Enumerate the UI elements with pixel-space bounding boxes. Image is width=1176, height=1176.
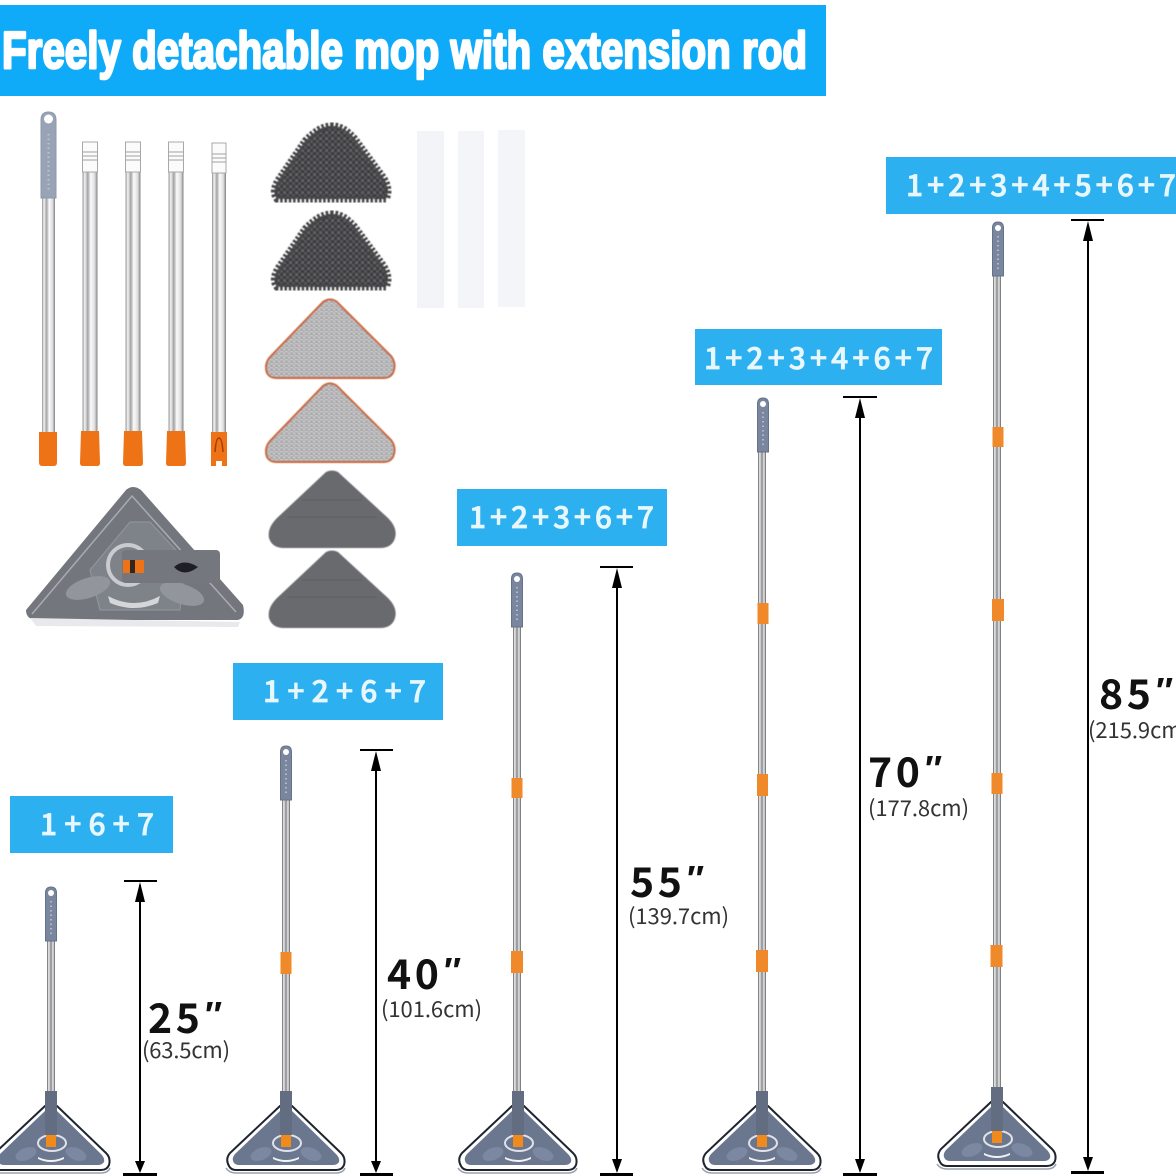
measurement: 85 inch: 85 (1099, 661, 1151, 721)
assembled mop: 40 inch (226, 746, 345, 1173)
measurement: 70 inch: ″ (923, 748, 942, 789)
tag: 1+2+6+7 (233, 663, 443, 720)
parts: extension rod 2 (80, 142, 100, 466)
parts: white strip 1 (417, 131, 444, 308)
parts: triangular mop base (26, 487, 244, 627)
tag: 1+2+3+4+6+7: 1+2+3+4+6+7 (704, 334, 933, 378)
arrow: 25 inch (123, 880, 157, 1176)
tag: 1+6+7: 1+6+7 (40, 800, 154, 844)
parts: white strip 3 (498, 130, 525, 307)
arrow: 85 inch (1071, 219, 1104, 1174)
measurement: 25 inch: ″ (203, 994, 222, 1035)
parts: orange-edged pad 2 (266, 384, 395, 462)
tag: 1+6+7 (10, 796, 173, 853)
tag: 1+2+6+7: 1+2+6+7 (263, 667, 426, 711)
parts: chenille pad 2 (274, 214, 388, 287)
tag: 1+2+3+6+7 (457, 489, 667, 546)
assembled mop: 70 inch (702, 398, 821, 1173)
measurement: 70 inch (868, 739, 969, 823)
assembled mop: 55 inch (458, 573, 577, 1173)
parts: extension rod 4 (166, 142, 186, 466)
arrow: 55 inch (600, 566, 633, 1176)
parts: grey microfiber pad 1 (269, 470, 396, 548)
parts: extension rod 3 (123, 142, 143, 466)
parts: orange-edged pad 1 (266, 300, 395, 378)
measurement: 25 inch: (63.5cm) (142, 1033, 230, 1065)
measurement: 70 inch: (177.8cm) (868, 791, 969, 823)
assembled mop: 85 inch (937, 222, 1056, 1169)
title banner: Freely detachable mop with extension rod (2, 22, 807, 80)
measurement: 85 inch (1088, 661, 1176, 745)
measurement: 55 inch: 55 (630, 849, 682, 909)
measurement: 40 inch: (101.6cm) (381, 992, 482, 1024)
measurement: 55 inch: (139.7cm) (628, 899, 729, 931)
arrow: 70 inch (843, 396, 877, 1176)
parts: chenille pad 1 (274, 126, 388, 199)
parts: grey microfiber pad 2 (269, 550, 396, 628)
parts: white strip 2 (458, 131, 484, 308)
measurement: 40 inch: ″ (442, 950, 461, 991)
assembled mop: 25 inch (0, 887, 110, 1173)
parts: connector rod 5 (211, 143, 227, 466)
measurement: 25 inch (142, 985, 230, 1065)
measurement: 55 inch: ″ (685, 858, 704, 899)
measurement: 40 inch (381, 941, 482, 1024)
tag: 1+2+3+4+5+6+7: 1+2+3+4+5+6+7 (906, 161, 1176, 205)
measurement: 85 inch: ″ (1154, 670, 1173, 711)
tag: 1+2+3+6+7: 1+2+3+6+7 (469, 493, 654, 537)
measurement: 25 inch: 25 (148, 985, 200, 1045)
parts: handle rod 1 (39, 112, 57, 466)
title banner (0, 5, 826, 96)
measurement: 40 inch: 40 (387, 941, 439, 1001)
measurement: 55 inch (628, 849, 729, 931)
arrow: 40 inch (360, 749, 393, 1176)
measurement: 70 inch: 70 (868, 739, 920, 799)
